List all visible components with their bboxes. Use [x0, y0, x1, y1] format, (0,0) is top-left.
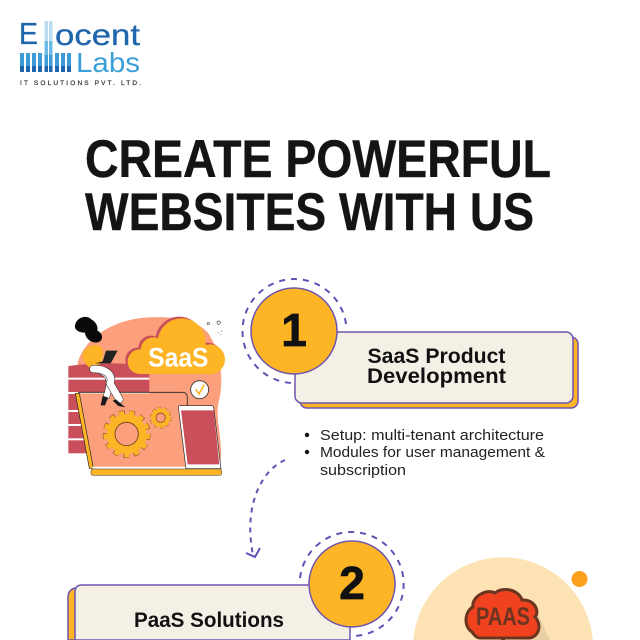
card 1 heading: SaaS Product — [368, 345, 506, 368]
tablet — [178, 406, 221, 469]
title: CREATE POWERFUL — [85, 130, 551, 189]
laptop — [95, 351, 118, 363]
step 2 — [68, 532, 404, 640]
PaaS cloud: PAAS — [476, 603, 530, 631]
near leg — [93, 369, 119, 399]
card 2 shadow — [68, 588, 100, 640]
bullet list — [305, 428, 545, 479]
number badge 1: 1 — [281, 304, 307, 356]
decorative dots — [207, 321, 222, 334]
title: WEBSITES WITH US — [85, 183, 534, 242]
database stack — [68, 363, 149, 453]
number badge 2 — [309, 541, 395, 627]
number badge 1 — [251, 288, 337, 374]
peach circle — [413, 557, 593, 640]
hair — [75, 317, 102, 342]
logo: Ellocent Labs: E — [19, 16, 38, 51]
logo: Ellocent Labs: ocent — [55, 19, 141, 52]
check badge — [191, 381, 209, 399]
laptop base — [91, 469, 222, 475]
illustration: SaaS — [68, 317, 225, 475]
arrow: step 1 to step 2 — [246, 460, 285, 557]
person on laptop — [75, 317, 125, 407]
card 1 shadow — [300, 337, 578, 408]
step 1 — [242, 279, 578, 479]
logo: Ellocent Labs: Labs — [76, 47, 140, 78]
far leg — [100, 371, 109, 396]
dashed ring 1 — [242, 279, 346, 383]
number badge 2: 2 — [339, 557, 365, 609]
large gear — [105, 413, 148, 455]
bullet list: Setup: multi-tenant architecture — [320, 428, 544, 444]
card 2 body — [75, 585, 350, 640]
bullet list: Modules for user management & — [320, 445, 545, 461]
card 2 heading: PaaS Solutions — [134, 609, 284, 632]
shoes — [101, 396, 108, 405]
card 1 heading — [367, 345, 506, 388]
bullet list: subscription — [320, 463, 406, 479]
dashed ring 2 — [300, 532, 404, 636]
shirt — [83, 345, 103, 367]
title — [85, 130, 551, 242]
small gear — [151, 408, 170, 427]
card 1 body — [295, 332, 573, 403]
laptop screen — [77, 393, 187, 468]
peach background blob — [77, 317, 221, 468]
logo: Ellocent Labs: IT SOLUTIONS PVT. LTD. — [20, 80, 141, 87]
orange dot — [572, 571, 588, 587]
cloud with SaaS: SaaS — [148, 343, 208, 373]
logo: Ellocent Labs — [19, 16, 141, 87]
cloud shadow — [525, 608, 550, 640]
card 1 heading: Development — [367, 365, 506, 388]
cloud with SaaS — [125, 317, 225, 374]
illustration: PaaS — [413, 557, 593, 640]
PaaS cloud — [466, 589, 539, 640]
